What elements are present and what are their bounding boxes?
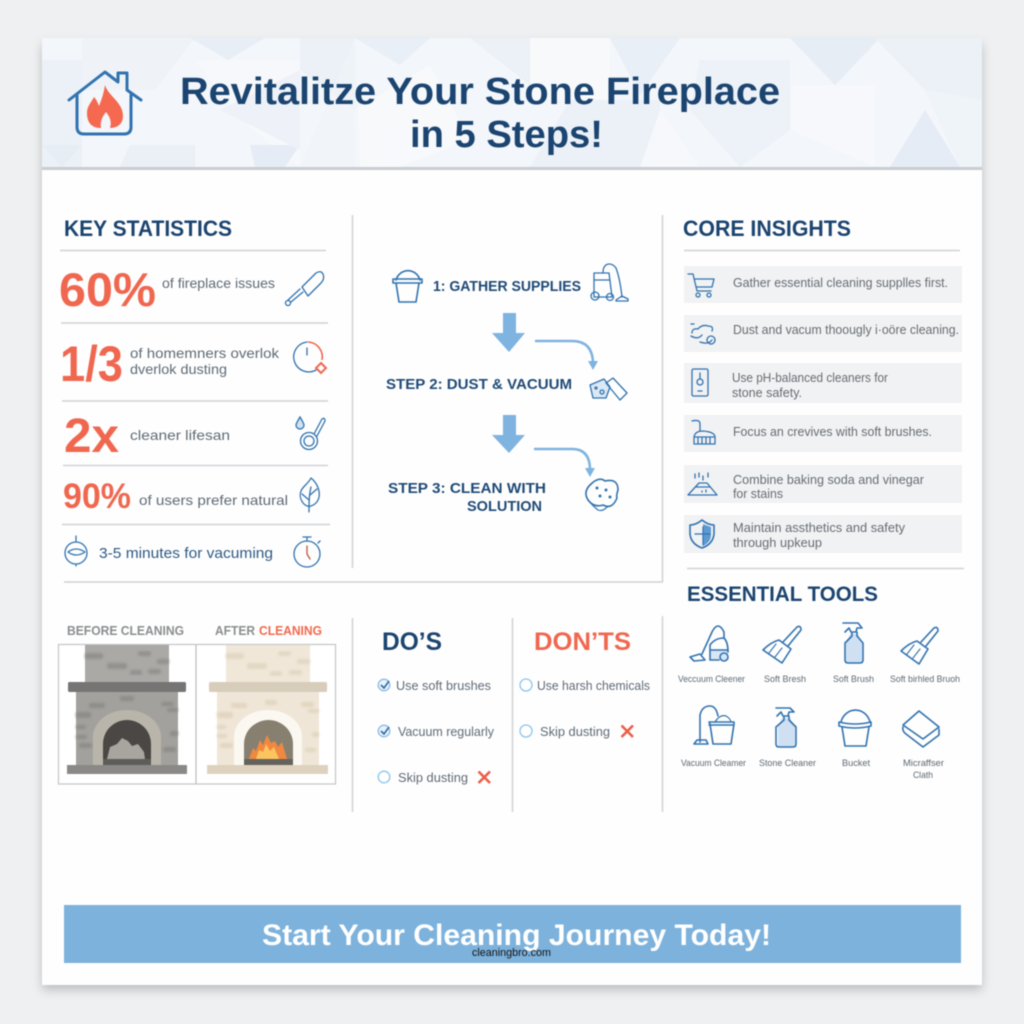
arrow: curved 1 [535, 341, 598, 370]
fireplace: after [207, 645, 328, 774]
label: after cleaning: AFTER [215, 624, 255, 638]
tool: microfiber cloth: Micraffser [903, 758, 944, 769]
stat: 2x: 2x [64, 410, 119, 463]
icon: stopwatch [294, 537, 320, 567]
stat: 60% [59, 263, 275, 316]
tool: microfiber cloth [903, 711, 944, 781]
label: after cleaning: CLEANING [259, 624, 322, 638]
panel: essential tools [678, 583, 960, 781]
icon: sponge and squeegee [590, 378, 627, 400]
tool: spray bottle [833, 623, 874, 685]
don't item 2: Skip dusting [540, 725, 610, 739]
insight 1 [684, 266, 962, 303]
panel: before and after [58, 624, 336, 784]
heading: essential tools: ESSENTIAL TOOLS [687, 583, 878, 606]
insight 3: Use pH-balanced cleaners for [732, 371, 888, 385]
step 3 label [388, 480, 546, 515]
panel: core insights [683, 216, 964, 568]
label: after cleaning [215, 624, 322, 638]
stat: 1/3: of homemners overlok [130, 345, 280, 361]
stat: 1/3: 1/3 [60, 336, 123, 392]
tool: soft brush 1: Soft Bresh [764, 674, 806, 685]
title: Revitalitze Your Stone Fireplace [180, 71, 780, 113]
heading: key statistics: KEY STATISTICS [64, 216, 232, 241]
icon: house with flame [69, 72, 141, 134]
tool: soft brush 1 [763, 626, 806, 685]
insight 3: stone safety. [732, 386, 802, 400]
tool: stone cleaner spray: Stone Cleaner [759, 758, 816, 769]
insight 6: Maintain assthetics and safety [733, 521, 906, 535]
insight 3 [684, 363, 962, 403]
step 2 label: STEP 2: DUST & VACUUM [386, 376, 572, 393]
stat: 60%: of fireplace issues [162, 275, 275, 291]
stat: vacuuming time: 3-5 minutes for vacuming [99, 546, 273, 562]
do item 3 [378, 771, 490, 785]
insight 2 [684, 315, 962, 352]
tool: microfiber cloth: Clath [913, 770, 933, 781]
icon: leaf [300, 478, 319, 512]
panel: key statistics [59, 216, 330, 567]
insight 2: Dust and vacum thoougly i·oöre cleaning. [733, 323, 959, 337]
icon: drop and spoon [296, 417, 325, 450]
heading: don'ts: DON’TS [534, 628, 631, 656]
heading: do's: DO’S [382, 628, 442, 656]
tool: vacuum with bucket: Vacuum Cleamer [681, 758, 746, 769]
arrow: curved 2 [534, 449, 595, 477]
title: in 5 Steps! [410, 114, 603, 156]
insight 4: Focus an crevives with soft brushes. [733, 425, 932, 439]
insight 6 [684, 515, 962, 553]
insight 5: Combine baking soda and vinegar [733, 473, 924, 487]
step 1 label: 1: GATHER SUPPLIES [433, 278, 581, 295]
tool: vacuum cleaner: Veccuum Cleener [678, 674, 745, 685]
stat: vacuuming time [65, 536, 273, 566]
stat: 2x: cleaner lifesan [130, 427, 230, 443]
insight 6: through upkeup [733, 536, 822, 550]
stat: 90%: of users prefer natural [139, 492, 288, 508]
tool: bucket [839, 710, 871, 769]
icon: sponge [586, 479, 618, 510]
panel: steps flow [386, 264, 628, 515]
insight 4 [684, 415, 962, 452]
step 3 label: STEP 3: CLEAN WITH [388, 480, 546, 497]
stat: 90%: 90% [63, 477, 131, 516]
tool: spray bottle: Soft Brush [833, 674, 874, 685]
stat: 2x [64, 410, 230, 463]
stat: 1/3 [60, 336, 280, 392]
do item 1: Use soft brushes [396, 679, 491, 693]
icon: bucket [393, 271, 422, 302]
icon: dust brush [286, 272, 324, 306]
do item 3: Skip dusting [398, 771, 468, 785]
heading: core insights: CORE INSIGHTS [683, 216, 851, 241]
don't item 1: Use harsh chemicals [537, 679, 650, 693]
stat: 1/3: dverlok dusting [130, 361, 227, 377]
stat: 60%: 60% [59, 263, 156, 316]
step 3 label: SOLUTION [467, 498, 542, 515]
arrow: down 2 [492, 415, 525, 453]
label: before cleaning: BEFORE CLEANING [67, 624, 184, 638]
icon: vacuum [591, 264, 628, 301]
tool: soft bristled brush: Soft birhled Bruoh [890, 674, 960, 685]
insight 5 [684, 465, 962, 503]
call to action banner: Start Your Cleaning Journey Today! [262, 919, 771, 952]
panel: do's [378, 628, 495, 785]
tool: bucket: Bucket [842, 758, 870, 769]
panel: don'ts [520, 628, 650, 739]
header banner [42, 38, 982, 170]
tool: vacuum with bucket [681, 706, 746, 769]
watermark: cleaningbro.com [472, 947, 551, 959]
call to action banner [64, 905, 961, 963]
title [180, 71, 780, 156]
fireplace: before [67, 645, 187, 774]
icon: clock with diamond [294, 342, 326, 373]
arrow: down 1 [492, 313, 525, 352]
insight 1: Gather essential cleaning supplles first. [733, 276, 948, 290]
tool: soft bristled brush [890, 627, 960, 685]
insight 5: for stains [733, 487, 783, 501]
do item 2: Vacuum regularly [398, 725, 495, 739]
tool: stone cleaner spray [759, 708, 816, 769]
tool: vacuum cleaner [678, 626, 745, 685]
stat: 90% [63, 477, 288, 516]
